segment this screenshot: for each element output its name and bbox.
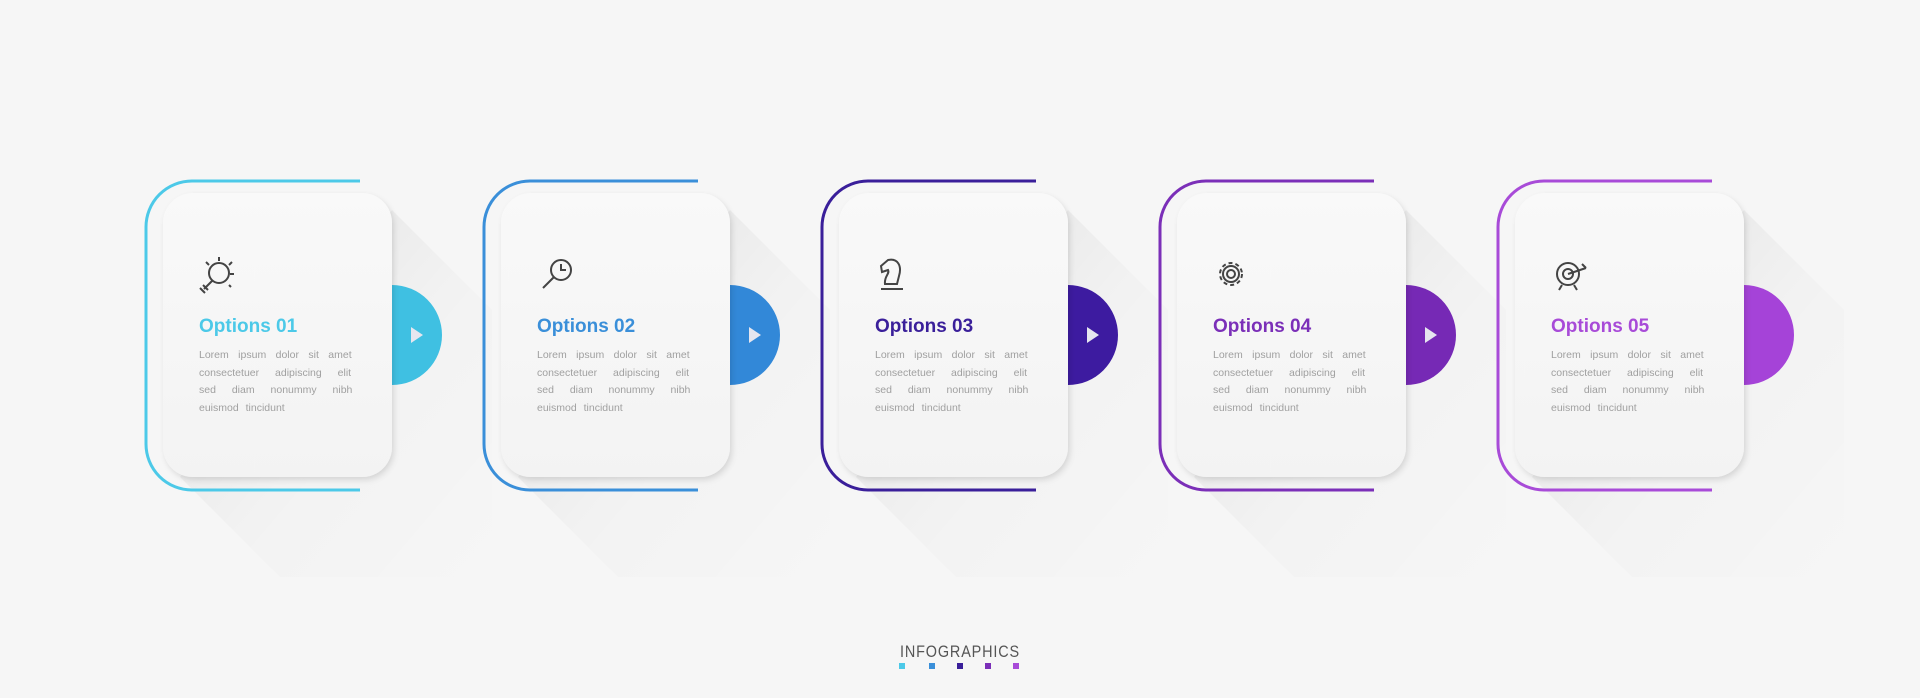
arrow circle [1356,285,1456,385]
icon: search clock [543,260,571,288]
arrow circle [1694,285,1794,385]
icon: light bulb [200,257,234,293]
outline bracket [1160,181,1374,490]
body text: euismod tincidunt [875,402,961,414]
title: Options 05 [1551,316,1650,337]
shadow [856,210,1168,577]
logo [899,642,1020,669]
logo: INFOGRAPHICS [900,642,1020,661]
body text: Lorem ipsum dolor sit amet [1551,349,1704,361]
title: Options 02 [537,316,635,337]
shadow [180,210,492,577]
arrow circle [342,285,442,385]
body text: Lorem ipsum dolor sit amet [199,349,352,361]
body text: euismod tincidunt [1551,402,1637,414]
body text: euismod tincidunt [199,402,285,414]
body text: sed diam nonummy nibh [199,384,353,396]
body text: consectetuer adipiscing elit [537,367,689,379]
title: Options 03 [875,316,973,337]
card panel [1177,193,1406,477]
body text: euismod tincidunt [1213,402,1299,414]
shadow [1532,210,1844,577]
card panel [839,193,1068,477]
body text: consectetuer adipiscing elit [199,367,351,379]
card panel [1515,193,1744,477]
outline bracket [146,181,360,490]
card 3 [822,181,1168,577]
card 5 [1498,181,1844,577]
card 2 [484,181,830,577]
title: Options 04 [1213,316,1312,337]
shadow [518,210,830,577]
card panel [163,193,392,477]
body text: consectetuer adipiscing elit [1213,367,1365,379]
body text: Lorem ipsum dolor sit amet [1213,349,1366,361]
icon: gear [1220,263,1242,285]
card panel [501,193,730,477]
body text: euismod tincidunt [537,402,623,414]
body text: consectetuer adipiscing elit [1551,367,1703,379]
icon: target [1557,263,1586,290]
body text: sed diam nonummy nibh [875,384,1029,396]
arrow circle [680,285,780,385]
body text: Lorem ipsum dolor sit amet [875,349,1028,361]
body text: sed diam nonummy nibh [537,384,691,396]
body text: sed diam nonummy nibh [1213,384,1367,396]
outline bracket [1498,181,1712,490]
icon: chess knight [881,260,903,289]
arrow circle [1018,285,1118,385]
body text: Lorem ipsum dolor sit amet [537,349,690,361]
shadow [1194,210,1506,577]
outline bracket [484,181,698,490]
body text: consectetuer adipiscing elit [875,367,1027,379]
card 1 [146,181,492,577]
title: Options 01 [199,316,298,337]
card 4 [1160,181,1506,577]
body text: sed diam nonummy nibh [1551,384,1705,396]
outline bracket [822,181,1036,490]
